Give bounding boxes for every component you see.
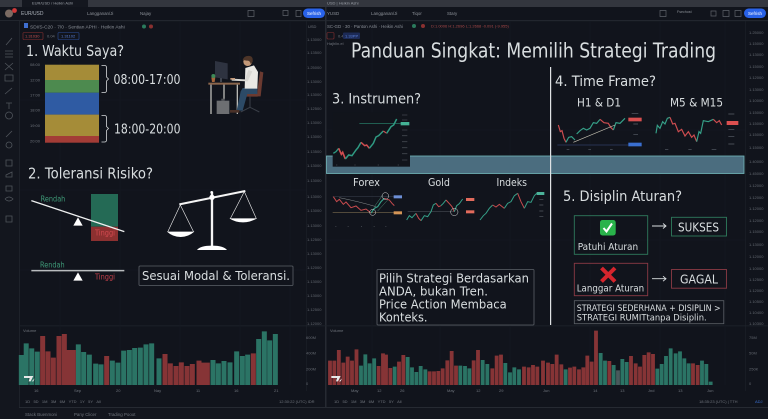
left volume chart: 600M xyxy=(306,335,316,340)
title: Panduan Singkat: Memilih Strategi Trading xyxy=(351,38,716,62)
label: Gold: Gold xyxy=(428,177,450,189)
right chart header: SC-GD · 30 · Panton Ashi · Heikin Ashi xyxy=(327,24,403,29)
label: M5 & M15: M5 & M15 xyxy=(670,96,723,110)
right chart header: Hajhlin.el xyxy=(327,41,344,46)
callout: Pilih Strategi xyxy=(377,270,534,325)
left volume chart: 400M xyxy=(306,350,316,356)
callout: Pilih Strategi: Price Action Membaca xyxy=(379,298,507,312)
right price axis: 1.10000 xyxy=(749,266,764,271)
icon: person at trading desk xyxy=(208,56,263,114)
left volume chart: 200M xyxy=(306,366,316,372)
box: Gagal: GAGAL xyxy=(680,273,718,287)
left price axis: 1.13000 xyxy=(307,223,322,228)
top browser tabs and toolbar: Tiqor xyxy=(412,11,422,16)
time range selectors xyxy=(25,399,763,404)
left volume chart xyxy=(21,328,316,386)
right price axis: 1.13000 xyxy=(749,87,764,92)
right volume chart: 0 xyxy=(749,381,752,386)
right price axis: 1.12000 xyxy=(749,218,764,223)
level risk balance diagram: Rendah xyxy=(40,260,65,269)
date axes xyxy=(34,388,713,393)
bracket 08:00-17:00 xyxy=(102,66,108,92)
right price axis: 1.15000 xyxy=(749,145,764,150)
left price axis: 1.12500 xyxy=(307,307,322,312)
callout: Pilih Strategi: Pilih Strategi Berdasarkan xyxy=(379,272,529,286)
left price axis: 1.13000 xyxy=(307,251,322,256)
tilted risk balance diagram xyxy=(31,194,124,241)
tilted risk balance diagram: Tinggi xyxy=(94,229,115,238)
callout: strategi sederhana: STRATEGI RUMITtanpa Disiplin. xyxy=(577,313,707,323)
heading: Time Frame: 4. Time Frame? xyxy=(555,74,656,90)
time range selectors: ADJ xyxy=(755,399,763,404)
arrow to Gagal xyxy=(652,276,666,281)
top browser tabs and toolbar: YUSD xyxy=(327,11,339,16)
right price axis: 1.15000 xyxy=(749,41,764,46)
mini chart: Indeks xyxy=(480,192,544,220)
top browser tabs and toolbar: EUR/USD / Heikin Ashi xyxy=(32,0,73,6)
date axes: May xyxy=(447,388,455,393)
left price axis: 1.13000 xyxy=(307,134,322,139)
right volume chart: 75M xyxy=(749,335,757,340)
date axes: Jun xyxy=(707,388,713,393)
date axes: 13 xyxy=(620,388,625,393)
callout: Pilih Strategi: ANDA, bukan Tren. xyxy=(379,285,488,299)
panel: 1. Waktu Saya xyxy=(26,42,180,144)
panel divider xyxy=(550,67,551,325)
time range selectors: 1D 5D 1M 3M 6M YTD 1Y 5Y All xyxy=(25,399,101,404)
blue horizontal price band xyxy=(326,156,744,174)
bottom tab bar: Pany Clicer xyxy=(74,412,97,417)
right volume chart xyxy=(330,328,759,386)
panel: 5. Disiplin Aturan xyxy=(563,189,726,324)
left price axis: 1.12500 xyxy=(307,106,322,111)
left price axis: 1.13000 xyxy=(307,79,322,84)
callout: strategi sederhana: STRATEGI SEDERHANA + DISIPLIN > xyxy=(577,304,721,314)
bottom tab bar: Stack Buenmoni xyxy=(25,412,57,417)
left price axis: 1.13000 xyxy=(307,37,322,42)
time axis labels: 12:00 xyxy=(30,78,41,82)
right price axis: 1.15000 xyxy=(749,132,764,137)
box: Sukses xyxy=(672,217,726,236)
bottom tab bar xyxy=(25,412,136,417)
left price axis: 1.13000 xyxy=(307,120,322,125)
box: Gagal xyxy=(672,270,726,288)
date axes: 11 xyxy=(196,388,201,393)
right price axis: 1.10400 xyxy=(749,310,764,315)
date axes: 14 xyxy=(593,388,598,393)
right price axis: 1.15000 xyxy=(749,64,764,69)
date axes: 16 xyxy=(234,388,239,393)
label 18:00-20:00: 18:00-20:00 xyxy=(114,122,180,138)
arrow to Sukses xyxy=(652,224,666,228)
heading: Waktu Saya: 1. Waktu Saya? xyxy=(26,42,124,60)
right volume chart: 250K xyxy=(749,366,759,372)
top browser tabs and toolbar: Najay xyxy=(140,11,152,16)
top browser tabs and toolbar: Stary xyxy=(447,11,458,16)
left price axis: 1.13000 xyxy=(307,92,322,97)
time range selectors: 1D 5D 1M 3M 6M YTD 5Y All xyxy=(334,399,402,404)
heading: Instrumen: 3. Instrumen? xyxy=(332,92,421,108)
left price axis xyxy=(307,37,322,326)
box: Langgar Aturan: Langgar Aturan xyxy=(577,283,644,294)
label: H1 & D1: H1 & D1 xyxy=(577,96,621,110)
mini chart: M5 & M15 xyxy=(656,114,738,149)
left price axis: 1.13000 xyxy=(307,163,322,168)
panel: 2. Toleransi Risiko xyxy=(28,165,293,286)
bracket 18:00-20:00 xyxy=(102,116,108,142)
box: Langgar Aturan xyxy=(574,263,648,296)
heading: Disiplin Aturan: 5. Disiplin Aturan? xyxy=(563,189,682,205)
date axes: Jnd xyxy=(648,388,654,393)
heading: Toleransi Risiko: 2. Toleransi Risiko? xyxy=(28,165,153,183)
left price axis: 1.12000 xyxy=(307,265,322,270)
time axis labels xyxy=(30,62,41,144)
top browser tabs and toolbar: USD | Heikin Ashi xyxy=(327,0,359,6)
top browser tabs and toolbar: Sefrish xyxy=(307,11,321,16)
right price axis: 1.15000 xyxy=(749,229,764,234)
left chart header: SDI/S-C20 · 7/0 · Sentian APHI · Heikin Ashi xyxy=(30,24,125,30)
left chart header: 1.31102 xyxy=(61,34,76,39)
left price axis: 1.13500 xyxy=(307,149,322,154)
left chart header: 1.31030 xyxy=(25,34,40,39)
box: Patuhi Aturan: Patuhi Aturan xyxy=(578,242,638,253)
panel: 4. Time Frame xyxy=(555,74,738,149)
left price axis: 1.13000 xyxy=(307,293,322,298)
date axes: Nay xyxy=(154,388,161,393)
level risk balance diagram: Tinggi xyxy=(94,272,115,281)
date axes: 21 xyxy=(274,388,279,393)
date axes: 12 xyxy=(476,388,481,393)
time axis labels: 18:00 xyxy=(30,108,41,112)
mini chart: Gold xyxy=(407,198,474,221)
right price axis: 1.12000 xyxy=(749,183,764,188)
left drawing tools sidebar xyxy=(5,38,13,222)
right price axis xyxy=(749,30,764,326)
right price axis: 1.15000 xyxy=(749,121,764,126)
date axes: 29 xyxy=(499,388,504,393)
left price axis: 1.12000 xyxy=(307,321,322,326)
right chart header: 1.33PP xyxy=(345,33,358,38)
level risk balance diagram xyxy=(31,260,124,281)
right price axis: 1.13000 xyxy=(749,242,764,247)
right price axis: 1.45000 xyxy=(749,171,764,176)
date axes: 12 xyxy=(377,388,382,393)
left price axis: 1.13000 xyxy=(307,178,322,183)
right price axis: 1.12000 xyxy=(749,75,764,80)
callout: Sesuai Modal: Sesuai Modal & Toleransi. xyxy=(142,269,290,283)
right volume chart: Volume xyxy=(330,328,344,333)
left price axis: 1.13000 xyxy=(307,208,322,213)
label: Forex: Forex xyxy=(353,177,380,189)
top browser tabs and toolbar xyxy=(5,0,766,18)
date axes: 16 xyxy=(34,388,39,393)
right price axis: 1.12000 xyxy=(749,254,764,259)
bottom tab bar: Trading Pooot xyxy=(108,412,136,417)
date axes: Jun xyxy=(543,388,549,393)
top browser tabs and toolbar: EUR/USD xyxy=(21,11,44,17)
tilted risk balance diagram: Rendah xyxy=(41,194,65,203)
top browser tabs and toolbar: Sefrish xyxy=(748,11,762,16)
right price axis: 1.13000 xyxy=(749,52,764,57)
right price axis: 1.10500 xyxy=(749,299,764,304)
top browser tabs and toolbar: Langganan/Ji xyxy=(87,11,113,16)
left volume chart: 0 xyxy=(306,381,309,386)
time axis labels: 19:00 xyxy=(30,123,41,128)
callout: Sesuai Modal xyxy=(139,266,293,286)
label: Indeks: Indeks xyxy=(496,177,527,189)
right chart header xyxy=(327,24,510,46)
date axes: 13 xyxy=(678,388,683,393)
right chart header: 0.4 xyxy=(338,33,344,38)
right price axis: 1.12000 xyxy=(749,288,764,293)
date axes: 20 xyxy=(116,388,121,393)
icon: balance scale xyxy=(167,191,257,250)
top browser tabs and toolbar: Langganan/Ji xyxy=(371,11,397,16)
left price axis: 1.13500 xyxy=(307,50,322,55)
left chart header: 0.04 xyxy=(47,34,56,39)
left chart header xyxy=(23,23,317,40)
time axis labels: 17:00 xyxy=(30,92,41,98)
right volume chart: 50M xyxy=(749,350,757,356)
date axes: 26 xyxy=(400,388,405,393)
right price axis: 1.10000 xyxy=(749,98,764,103)
right price axis: 1.40000 xyxy=(749,159,764,164)
right price axis: 1.10300 xyxy=(749,321,764,326)
callout: strategi sederhana xyxy=(574,301,724,324)
label 08:00-17:00: 08:00-17:00 xyxy=(114,73,180,88)
left price axis: 1.13000 xyxy=(307,279,322,284)
right price axis: 1.15000 xyxy=(749,110,764,115)
left price axis: 1.12500 xyxy=(307,237,322,242)
time axis labels: 08:00 xyxy=(30,62,41,67)
left price axis: 1.25000 xyxy=(307,65,322,70)
right price axis: 1.25000 xyxy=(749,30,764,35)
time blocks xyxy=(45,65,99,143)
time range selectors: 12:30:22 (UTC) IDR xyxy=(279,399,315,404)
left volume chart: Volume xyxy=(23,328,37,333)
time range selectors: 18:35:23 (UTC) | TTH xyxy=(699,399,738,404)
mini chart: Forex xyxy=(333,193,402,226)
left price axis: 1.13000 xyxy=(307,194,322,199)
panel: 3. Instrumen xyxy=(332,92,544,325)
right chart header: D:1.0006 H:1.2696 L:1.2668 -0.091 (-9.955) xyxy=(431,24,510,29)
right price axis: 1.12000 xyxy=(749,206,764,211)
right price axis: 1.12000 xyxy=(749,195,764,200)
top browser tabs and toolbar: Fsechost xyxy=(677,10,692,14)
box: Patuhi Aturan xyxy=(574,216,648,254)
date axes: May xyxy=(351,388,359,393)
callout: Pilih Strategi: Konteks. xyxy=(379,310,428,324)
right price axis: 1.12500 xyxy=(749,277,764,282)
time axis labels: 20:00 xyxy=(30,138,41,144)
date axes: Sep xyxy=(74,388,82,393)
left chart header: USD xyxy=(308,24,317,29)
mini chart: H1 & D1 xyxy=(557,113,642,149)
box: Sukses: SUKSES xyxy=(678,220,719,234)
main instrument chart xyxy=(333,112,410,167)
